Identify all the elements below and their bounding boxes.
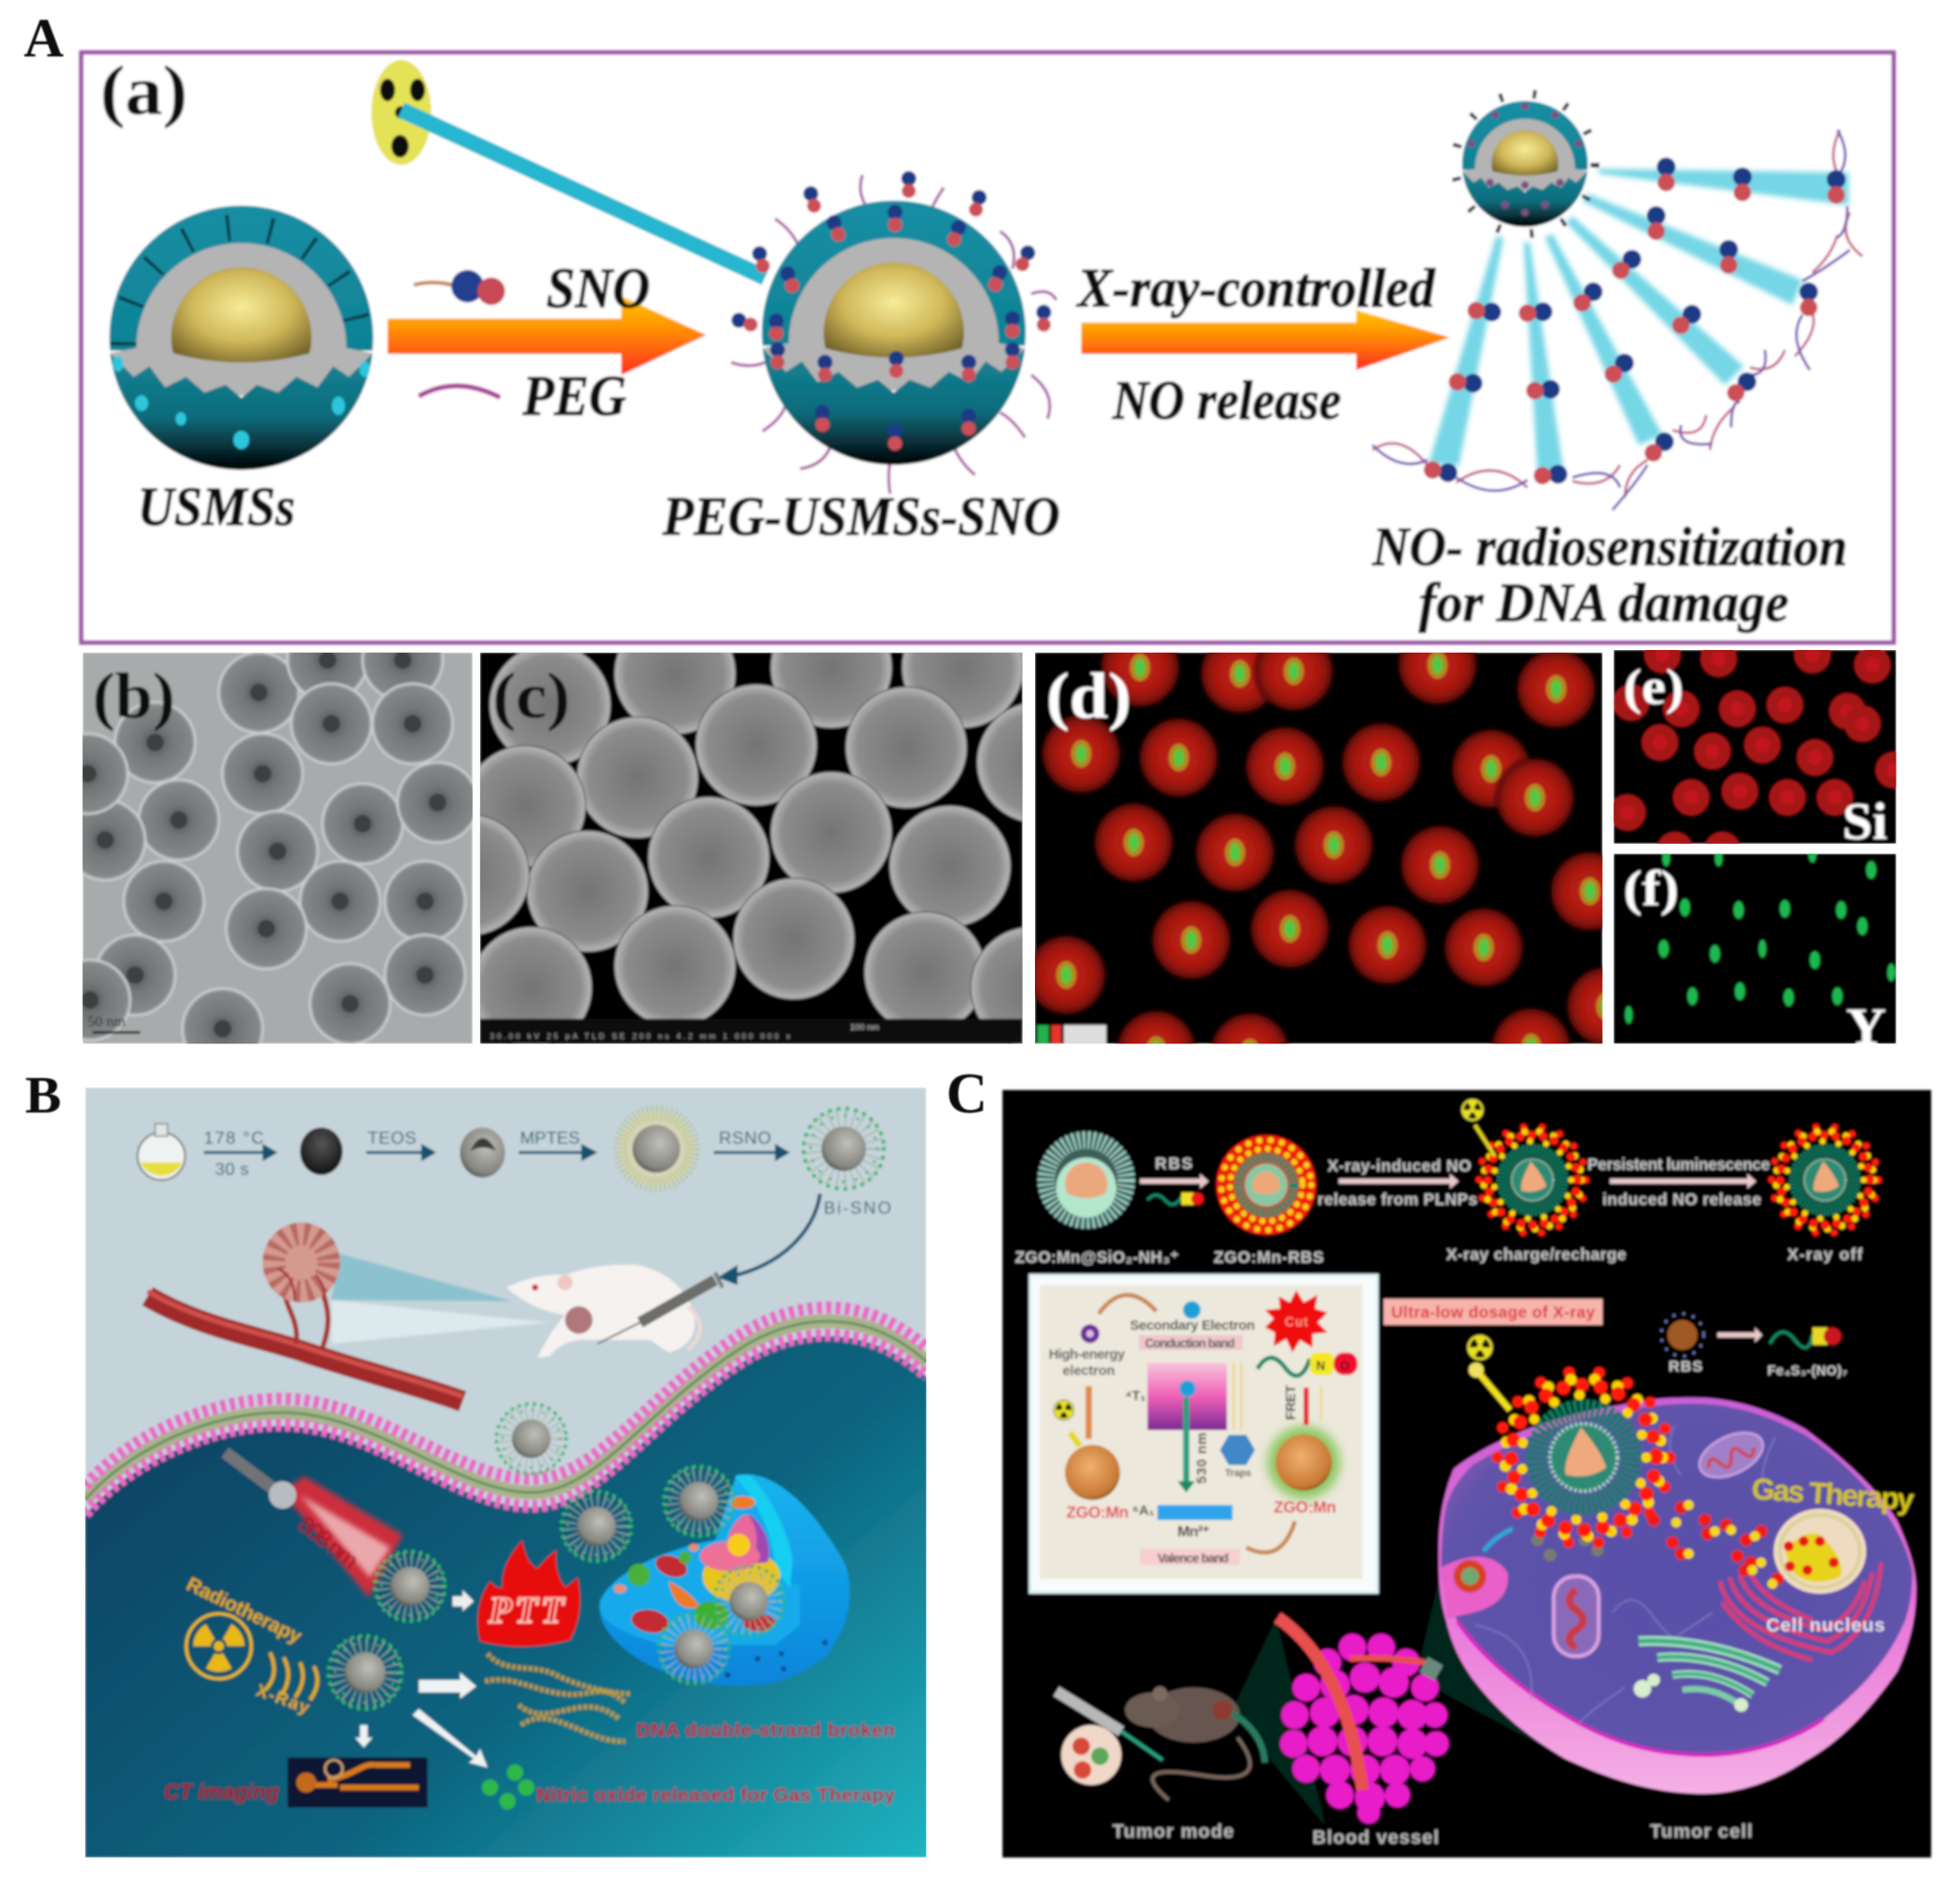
level 4T1: ⁴T₁: [1125, 1389, 1146, 1403]
curved arrow: [718, 1194, 820, 1285]
valence band: [1140, 1549, 1240, 1566]
label (c): (c): [492, 660, 570, 732]
label 808 nm: 808 nm: [293, 1512, 363, 1574]
label (a): (a): [100, 52, 187, 130]
FRET label and arrow: FRET: [1284, 1385, 1299, 1420]
top row particles: ZGO:Mn@SiO₂-NH₃⁺: [1015, 1248, 1179, 1266]
labels: [204, 1127, 891, 1218]
panel: (a) schematic: [81, 52, 1894, 643]
X-ray beam: [401, 110, 765, 278]
particles: [375, 1551, 445, 1622]
panel C: ZGO:Mn therapy schematic: [1002, 1090, 1931, 1858]
N-O molecule: [1258, 1352, 1358, 1375]
scale bar: [88, 1014, 140, 1034]
top row particles: ZGO:Mn-RBS: [1214, 1248, 1324, 1266]
top row particles: RBS: [1155, 1154, 1193, 1172]
top row particles: [1015, 1099, 1878, 1266]
particle: X-ray off: [1772, 1127, 1878, 1234]
particles in and around cell: [561, 1466, 784, 1684]
panel: (f) Y map: [1614, 848, 1897, 1056]
label NO-radiosensitization: NO- radiosensitization: [1372, 516, 1847, 577]
panel label A: A: [24, 7, 64, 68]
530 nm label: 530 nm: [1195, 1432, 1210, 1484]
particle: X-ray charge: [1479, 1127, 1586, 1234]
SEM info bar: 30.00 kV 25 pA TLD SE 200 ns 4.2 mm 1 000 000 x: [490, 1032, 790, 1041]
arrow: SNO PEG step: [388, 297, 706, 375]
cytoskeleton lines: [1475, 1425, 1775, 1725]
left ball with X-ray: [1054, 1387, 1120, 1500]
electrons: [1081, 1301, 1201, 1343]
labels: RSNO: [719, 1127, 771, 1147]
flashlight with 808 nm beam: [225, 1453, 403, 1597]
X-ray waves: [265, 1652, 317, 1700]
level 6A1: ⁶A₁: [1133, 1504, 1154, 1519]
arrow: X-ray release step: [1082, 310, 1450, 370]
beam tumour to rat: [331, 1253, 550, 1344]
label X-ray-controlled: X-ray-controlled: [1076, 256, 1436, 318]
callout: ultra-low dosage: [1384, 1299, 1603, 1325]
labels: TEOS: [367, 1127, 416, 1147]
callout: ultra-low dosage: Ultra-low dosage of X-ray: [1391, 1303, 1595, 1321]
label Cell nucleus: Cell nucleus: [1766, 1615, 1884, 1636]
top row particles: X-ray off: [1787, 1245, 1863, 1264]
icon: radiation small: [1461, 1099, 1495, 1156]
arrows: [1140, 1174, 1756, 1189]
arrows: [204, 1152, 785, 1154]
mouse with syringe: [1056, 1686, 1265, 1800]
label Y: Y: [1846, 998, 1886, 1056]
label Si: Si: [1843, 793, 1887, 850]
band box: [1148, 1362, 1227, 1430]
label CT imaging: CT imaging: [164, 1779, 279, 1804]
labels: MPTES: [520, 1127, 580, 1147]
CT image: [287, 1758, 428, 1807]
label SNO: SNO: [546, 257, 650, 321]
icon: PEG chain: [419, 386, 500, 397]
label (f): (f): [1623, 860, 1678, 916]
label DNA double-strand broken: DNA double-strand broken: [636, 1720, 895, 1741]
yellow thin arrows: [1234, 1362, 1321, 1430]
cell membrane: [85, 1307, 928, 1514]
icon: MPTES particle: [619, 1112, 694, 1186]
FRET label and arrow: [1284, 1385, 1306, 1425]
particle: USMSs: [109, 205, 373, 470]
labels bottom: Tumor mode: [1112, 1821, 1234, 1842]
panel: (d) elemental map merged: [1035, 653, 1603, 1044]
particle: PEG-USMSs-SNO: [729, 171, 1056, 493]
RBS conversion: [1662, 1314, 1847, 1378]
labels bottom: [1112, 1821, 1752, 1848]
blue level bar: [1157, 1505, 1233, 1520]
label nitric oxide: Nitric oxide released for Gas Therapy: [536, 1785, 895, 1806]
green emission arrow: [1178, 1380, 1195, 1492]
mitochondrion top: [1692, 1424, 1770, 1486]
panel: (e) Si map: [1613, 650, 1897, 844]
conduction band: Conduction band: [1145, 1336, 1235, 1350]
white arrows: [355, 1672, 488, 1767]
starburst Cut: [1265, 1290, 1328, 1352]
particle: ZGO:Mn@SiO2: [1038, 1131, 1135, 1229]
labels bottom: Blood vessel: [1313, 1828, 1439, 1848]
RBS conversion: Fe₄S₃-(NO)₇: [1767, 1363, 1847, 1378]
Mn2+ label: Mn²⁺: [1178, 1523, 1210, 1540]
panel: (c) SEM image: [479, 653, 1023, 1044]
N-O molecule: N: [1317, 1359, 1325, 1373]
RBS conversion: RBS: [1669, 1358, 1703, 1375]
icon: black core: [300, 1127, 342, 1175]
secondary electron label: Secondary Electron: [1130, 1319, 1255, 1334]
scale bar: 50 nm: [88, 1014, 126, 1030]
top row particles: X-ray charge/recharge: [1446, 1245, 1626, 1264]
brown curved arrows: [1098, 1295, 1295, 1553]
icon: flask: [138, 1124, 185, 1180]
rat with syringe: [506, 1265, 723, 1358]
icon: mesoporous core: [460, 1127, 505, 1178]
top row particles: induced NO release: [1603, 1190, 1761, 1209]
icon: SNO molecule: [414, 270, 505, 305]
PTT flame: PTT: [488, 1589, 565, 1631]
blood vessel: [147, 1275, 462, 1402]
beams and DNA fan: [1373, 94, 1862, 510]
panel B: Bi-SNO therapy schematic: [85, 1087, 928, 1858]
traps hexagon: Traps: [1225, 1468, 1251, 1479]
tumor blood vessel cluster: [1277, 1618, 1449, 1824]
cell organelles: [600, 1474, 849, 1686]
ZGO:Mn labels: ZGO:Mn: [1066, 1502, 1129, 1521]
label (e): (e): [1623, 659, 1684, 715]
tumor cell: [1439, 1398, 1916, 1794]
SEM info bar: [480, 1018, 1023, 1044]
particle entering cell: [496, 1403, 566, 1473]
label for DNA damage: for DNA damage: [1418, 572, 1788, 633]
N-O molecule: O: [1340, 1359, 1349, 1373]
inset: energy diagram: [1030, 1275, 1377, 1593]
icon: Bi-SNO particle: [804, 1109, 884, 1189]
top row particles: release from PLNPs: [1318, 1190, 1477, 1209]
cell interior: [85, 1336, 928, 1858]
valence band: Valence band: [1157, 1552, 1229, 1566]
panel label C: C: [946, 1062, 987, 1126]
right ball glowing: [1267, 1426, 1340, 1499]
label PEG: PEG: [522, 365, 627, 428]
panel: (b) TEM image: [82, 653, 473, 1044]
particle: ZGO:Mn-RBS: [1216, 1135, 1317, 1235]
starburst Cut: Cut: [1285, 1315, 1307, 1329]
labels bottom: Tumor cell: [1649, 1821, 1752, 1842]
green projection wedges: [1231, 1571, 1550, 1825]
top row particles: X-ray-induced NO: [1328, 1156, 1471, 1175]
label USMSs: USMSs: [138, 476, 295, 537]
label (b): (b): [92, 660, 175, 732]
top row particles: Persistent luminescence: [1587, 1155, 1770, 1174]
synthesis row: [138, 1109, 891, 1285]
traps hexagon: [1220, 1435, 1255, 1479]
electron label: electron: [1062, 1363, 1115, 1378]
X-ray activated particle: [328, 1636, 402, 1709]
panel label B: B: [25, 1067, 62, 1125]
label Radiotherapy: Radiotherapy: [183, 1573, 305, 1648]
nucleus: [1774, 1509, 1866, 1594]
legend strip: [1038, 1025, 1106, 1044]
labels: Bi-SNO: [823, 1198, 891, 1218]
inset: energy diagram: ZGO:Mn: [1274, 1498, 1336, 1516]
ER: [1720, 1563, 1881, 1660]
high-energy label: High-energy: [1049, 1348, 1125, 1362]
arrow to PTT: [452, 1590, 474, 1611]
label PEG-USMSs-SNO: PEG-USMSs-SNO: [662, 486, 1060, 547]
vesicle: [1442, 1528, 1512, 1619]
mitochondrion bottom: [1553, 1576, 1599, 1656]
PTT flame: [477, 1540, 580, 1647]
label NO release: NO release: [1111, 369, 1341, 431]
label (d): (d): [1046, 660, 1131, 732]
released NO: [1648, 1501, 1784, 1585]
Golgi: [1638, 1641, 1780, 1705]
Golgi vesicles: [1634, 1674, 1748, 1712]
icon: radiation source: [371, 60, 432, 165]
SEM info bar: 100 nm: [850, 1023, 879, 1032]
icon: radiation symbol: [186, 1613, 252, 1679]
DNA strands: [485, 1653, 631, 1741]
labels: 30 s: [215, 1159, 249, 1179]
big spiky particle: [1467, 1334, 1670, 1561]
label X-Ray: X-Ray: [254, 1680, 312, 1718]
tumour: [263, 1223, 340, 1303]
RBS molecule: [1148, 1193, 1204, 1205]
labels: 178 °C: [204, 1127, 264, 1147]
label Gas Therapy: Gas Therapy: [1751, 1472, 1915, 1516]
green NO dots: [482, 1764, 534, 1809]
